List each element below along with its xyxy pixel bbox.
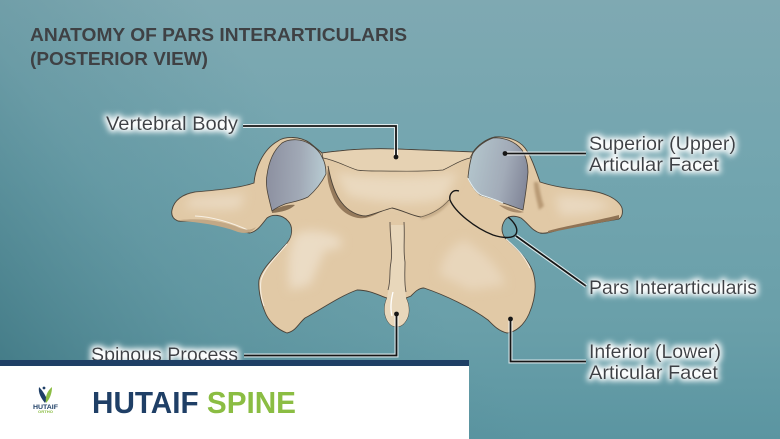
title: (POSTERIOR VIEW) bbox=[30, 49, 208, 69]
pars interarticularis outline bbox=[450, 191, 517, 238]
icon: Hutaif logo: HUTAIF bbox=[33, 404, 58, 411]
labels: Articular Facet bbox=[589, 155, 720, 176]
icon: Hutaif logo: ORTHO bbox=[38, 410, 53, 414]
icon: Hutaif logo bbox=[33, 387, 58, 414]
lobe rim highlights bbox=[195, 216, 530, 306]
bone silhouette bbox=[172, 137, 622, 333]
vertebral body band bbox=[322, 149, 473, 171]
labels bbox=[91, 114, 757, 384]
labels: Pars Interarticularis bbox=[589, 278, 757, 299]
leader lines bbox=[243, 126, 586, 362]
vertebra illustration bbox=[172, 137, 622, 333]
spinal canal left edge shadow bbox=[327, 168, 382, 218]
title bbox=[30, 25, 407, 69]
left articular facet bbox=[266, 140, 326, 211]
labels: Articular Facet bbox=[589, 363, 719, 384]
labels: Vertebral Body bbox=[106, 114, 239, 135]
spinal canal edge line bbox=[328, 166, 449, 217]
spinous process ridges bbox=[388, 222, 406, 292]
transverse process undersides bbox=[180, 219, 256, 233]
right articular facet bbox=[468, 138, 528, 210]
superior process shadow left bbox=[272, 205, 295, 213]
title: ANATOMY OF PARS INTERARTICULARIS bbox=[30, 25, 407, 45]
spinous process bbox=[385, 225, 409, 327]
footer panel bbox=[0, 360, 469, 439]
labels: Inferior (Lower) bbox=[589, 342, 721, 363]
bone shading bbox=[185, 172, 612, 290]
brand name: HUTAIF SPINE bbox=[92, 385, 296, 420]
labels: Superior (Upper) bbox=[589, 134, 736, 155]
labels: Spinous Process bbox=[91, 345, 238, 366]
superior process shadow right bbox=[499, 205, 524, 213]
